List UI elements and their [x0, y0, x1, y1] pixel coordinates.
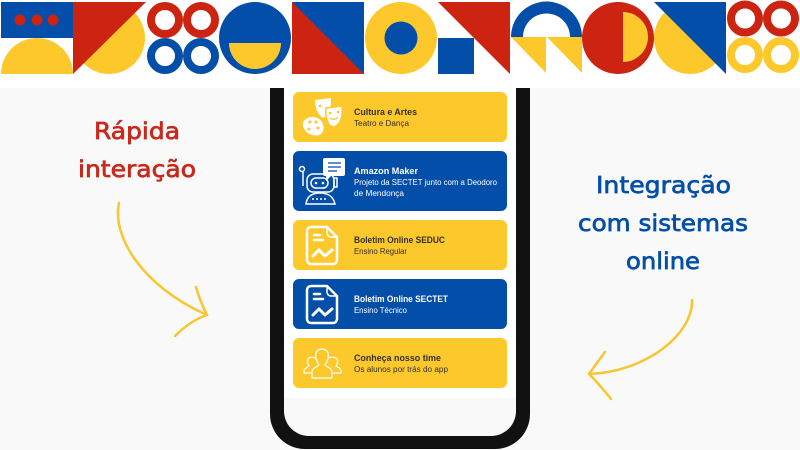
heading: Integração com sistemas online: com sistemas	[578, 211, 748, 237]
card text: Os alunos por trás do app	[354, 365, 449, 374]
tile: blue triangle over yellow circle	[654, 2, 726, 74]
arrow: right yellow arrow pointing to phone	[589, 300, 692, 399]
icon: document with chart	[307, 286, 337, 323]
icon: robot with speech bubble	[300, 158, 345, 204]
tile: red and blue rings	[151, 6, 215, 70]
card text: Ensino Regular	[354, 247, 407, 256]
heading: Rápida interação	[78, 119, 196, 183]
card text	[354, 166, 498, 198]
icon: team of people	[304, 349, 341, 378]
card: Conheça nosso time	[293, 338, 507, 388]
tile: red triangle and blue square	[438, 2, 510, 74]
heading: Integração com sistemas online: Integração	[596, 173, 731, 199]
card text	[354, 107, 417, 128]
icon: document with chart	[307, 227, 337, 264]
card text: Cultura e Artes	[354, 107, 417, 117]
card text: Boletim Online SEDUC	[354, 235, 445, 245]
geometric banner	[0, 0, 800, 88]
card text: Projeto da SECTET junto com a Deodoro	[354, 178, 498, 187]
card text	[354, 294, 448, 315]
arrow: left yellow arrow pointing to phone	[118, 203, 207, 336]
card text: Conheça nosso time	[354, 353, 441, 363]
card text: Teatro e Dança	[354, 119, 410, 128]
heading: Integração com sistemas online	[578, 173, 748, 275]
card: Amazon Maker	[293, 151, 507, 211]
tile: blue panel with dots and yellow dome	[1, 2, 73, 74]
tile: blue arch and yellow triangles	[511, 2, 582, 73]
tile: red circle with yellow half	[582, 2, 654, 74]
tile: blue circle with yellow half	[219, 2, 291, 74]
tile: yellow ring with blue centre	[365, 2, 437, 74]
tile: red and yellow rings	[731, 4, 795, 69]
card text: Boletim Online SECTET	[354, 294, 448, 304]
card: Cultura e Artes	[293, 92, 507, 142]
card text	[354, 235, 445, 256]
heading: Integração com sistemas online: online	[626, 249, 700, 275]
card: Boletim Online SECTET	[293, 279, 507, 329]
phone mockup	[270, 88, 530, 449]
icon: theatre masks and palette	[302, 98, 342, 136]
tile: blue and red diagonal square	[292, 2, 364, 74]
card text: Ensino Técnico	[354, 306, 408, 315]
tile: red triangle over yellow circle	[73, 2, 146, 74]
card text: Amazon Maker	[354, 166, 418, 176]
heading: Rápida interação: Rápida	[94, 119, 180, 145]
card: Boletim Online SEDUC	[293, 220, 507, 270]
heading: Rápida interação: interação	[78, 157, 196, 183]
card text	[354, 353, 449, 374]
card text: de Mendonça	[354, 189, 405, 198]
